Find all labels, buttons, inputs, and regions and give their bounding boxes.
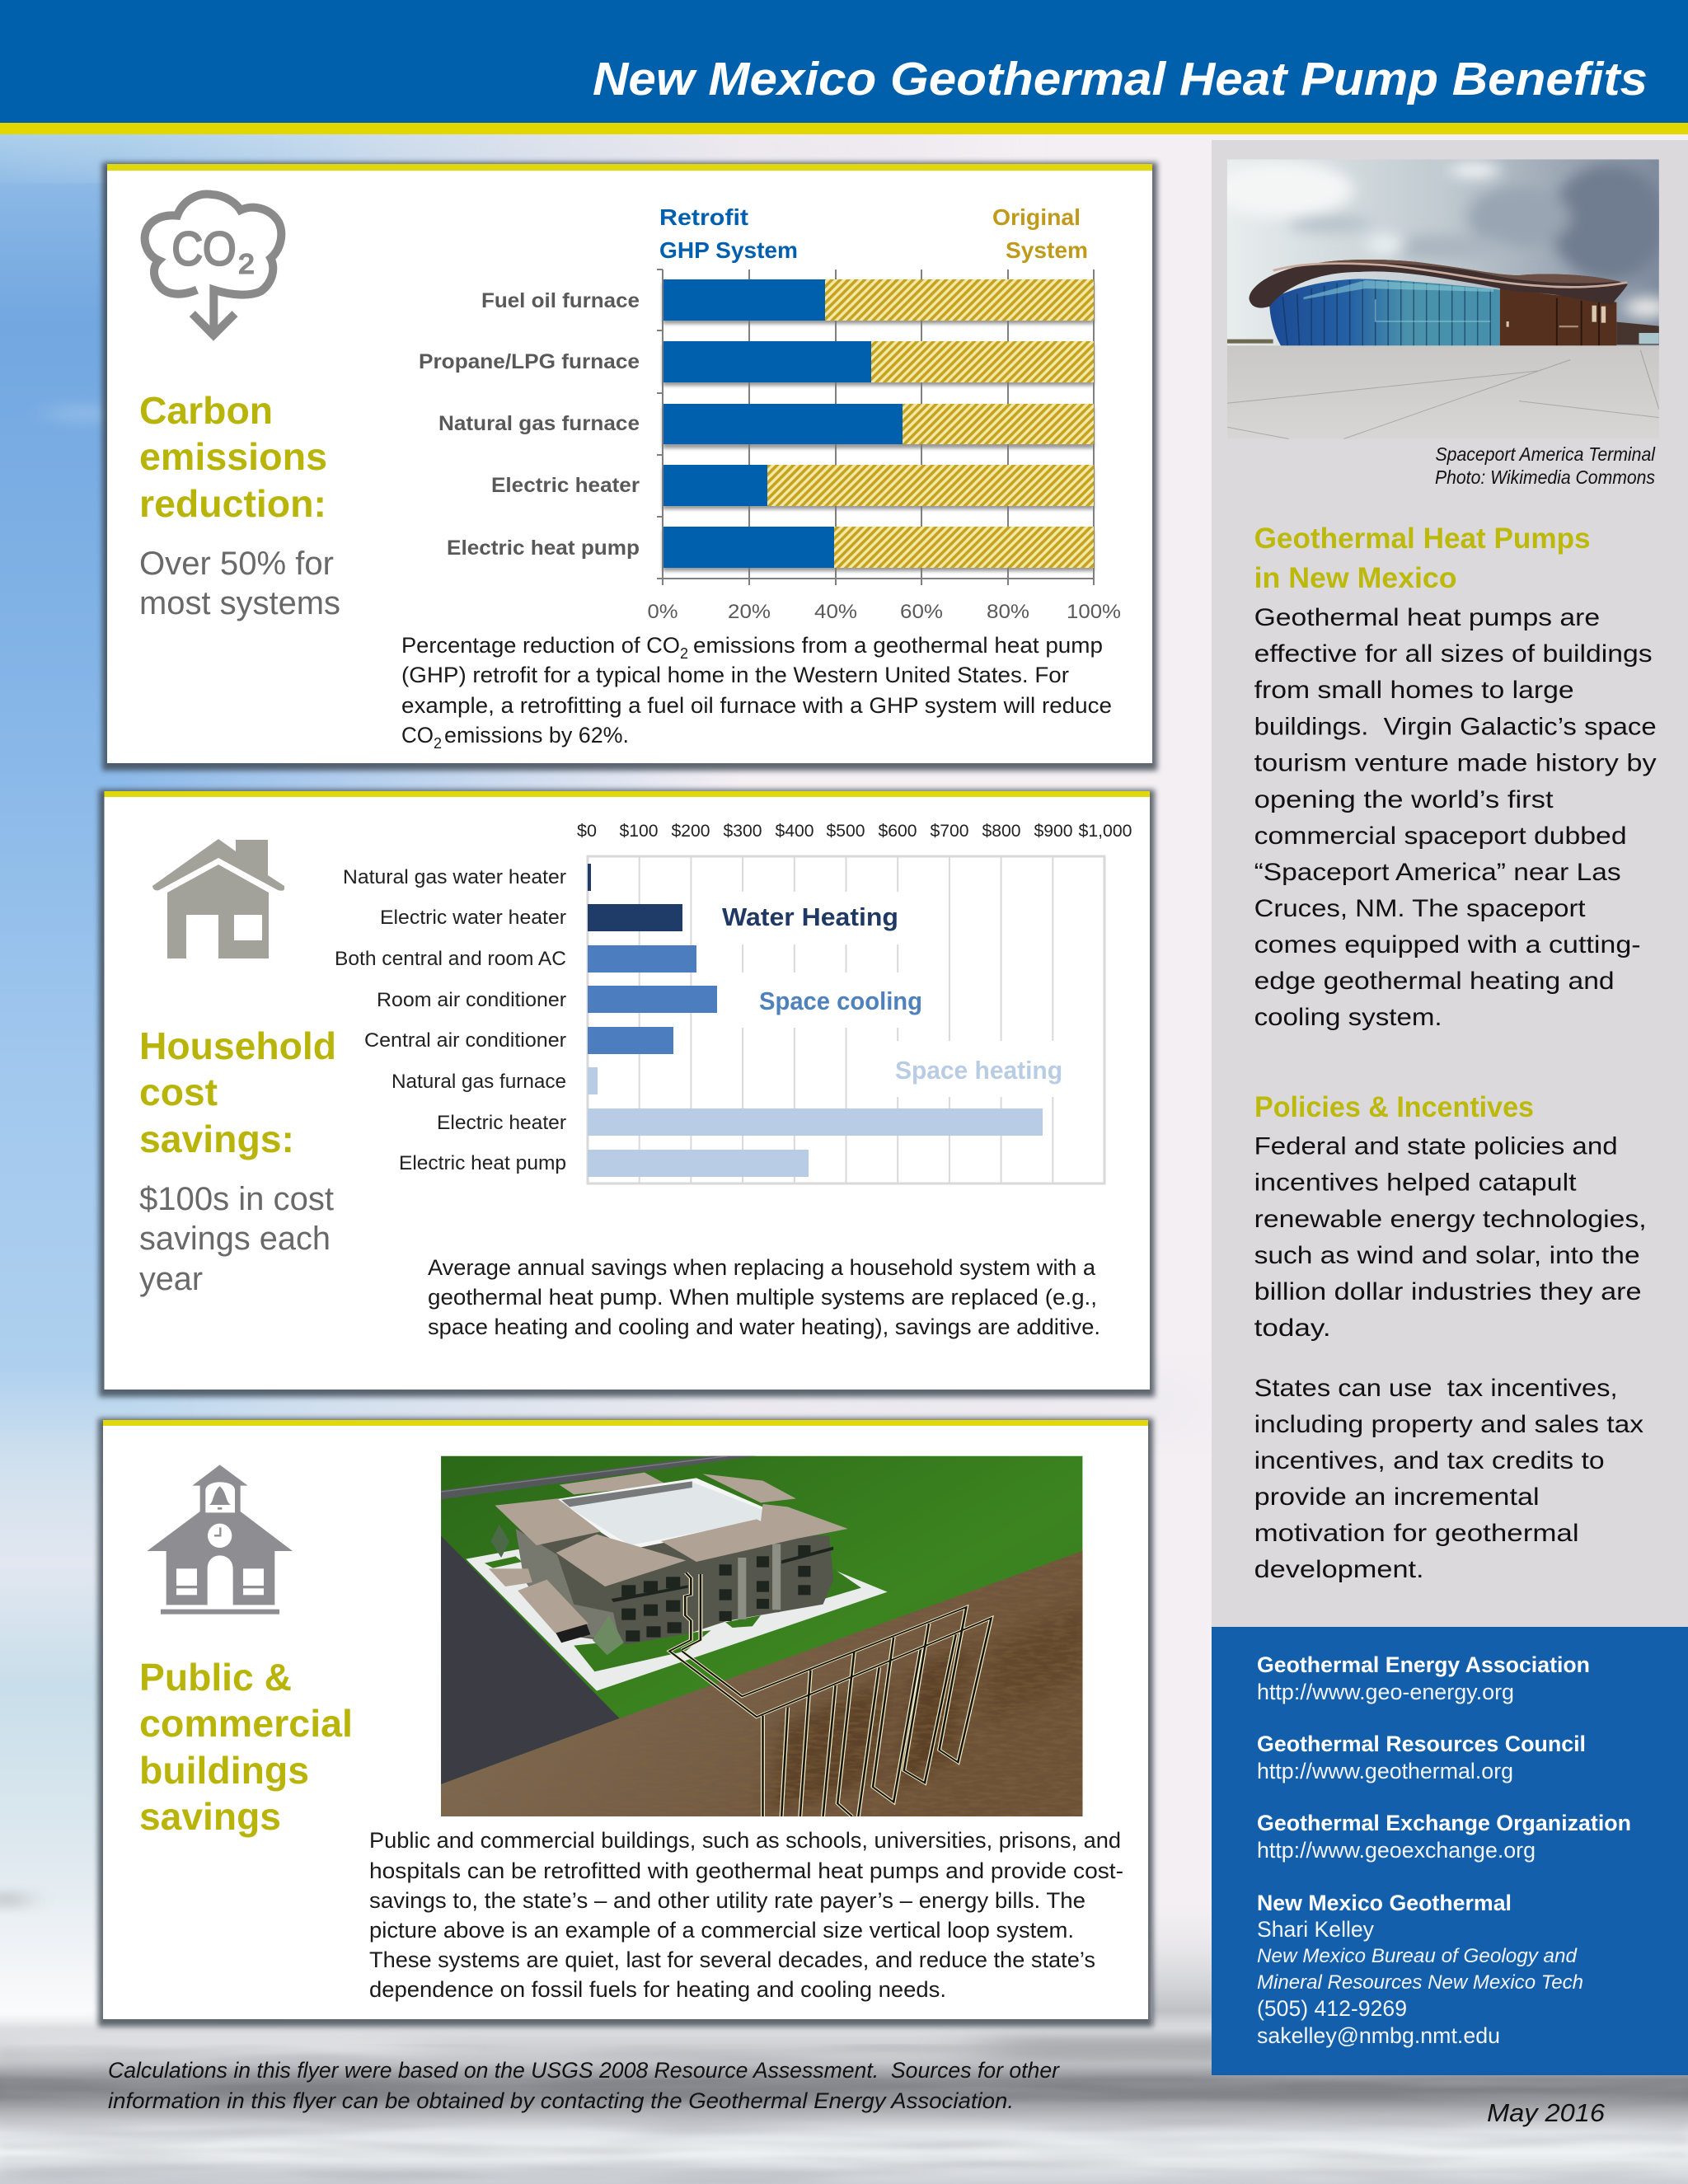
caption: CO2 chart: Percentage reduction of CO (401, 633, 680, 658)
bar chart: annual savings: $600 (879, 822, 917, 841)
icon: CO2 cloud with down arrow (145, 194, 281, 335)
bar chart: CO2 reduction: 60% (900, 601, 943, 623)
caption: household savings (428, 1255, 1100, 1339)
footnote: calculation sources: Calculations in this flyer were based on the USGS 2008 Resource Assessment. Sources for other (108, 2058, 1060, 2083)
caption: CO2 chart: example, a retrofitting a fuel oil furnace with a GHP system will reduce (401, 693, 1112, 718)
contact: New Mexico Geothermal: Mineral Resources New Mexico Tech (1257, 1971, 1583, 1994)
bar chart: annual savings (335, 822, 1132, 1183)
contact: Geothermal Exchange Organization: http://www.geoexchange.org (1257, 1838, 1536, 1863)
text block: spaceport narrative: commercial spaceport dubbed (1254, 823, 1627, 850)
sidewalk (466, 1549, 888, 1691)
panel: contacts (1212, 1627, 1688, 2075)
bar chart: annual savings: Natural gas water heater (343, 866, 566, 888)
contact: New Mexico Geothermal: New Mexico Geothermal (1257, 1891, 1512, 1915)
heading: policies and incentives: Policies & Incentives (1254, 1091, 1534, 1123)
heading: household cost savings: Household (139, 1024, 336, 1067)
bar chart: CO2 reduction: Natural gas furnace (438, 412, 640, 435)
contact: Geothermal Exchange Organization: Geothermal Exchange Organization (1257, 1811, 1631, 1835)
text block: policies: renewable energy technologies, (1254, 1206, 1647, 1233)
text block: policies: motivation for geothermal (1254, 1520, 1579, 1547)
contact: New Mexico Geothermal: (505) 412-9269 (1257, 1996, 1407, 2021)
subheading: 100s in cost savings: $100s in cost (139, 1181, 334, 1217)
bar chart: annual savings: Water Heating (722, 902, 898, 931)
caption: commercial buildings: dependence on fossil fuels for heating and cooling needs. (369, 1977, 946, 2002)
subheading: 100s in cost savings (139, 1181, 334, 1297)
text block: policies: billion dollar industries they are (1254, 1278, 1642, 1305)
heading: household cost savings: savings: (139, 1118, 294, 1160)
contact: Geothermal Energy Association (1257, 1652, 1590, 1704)
bar chart: CO2 reduction: 80% (987, 601, 1029, 623)
bar chart: annual savings: $200 (671, 822, 710, 841)
text block: spaceport narrative: effective for all sizes of buildings (1254, 640, 1653, 668)
contact: New Mexico Geothermal: New Mexico Bureau of Geology and (1257, 1945, 1578, 1967)
text block: spaceport narrative: Cruces, NM. The spaceport (1254, 895, 1586, 922)
text block: policies: today. (1254, 1315, 1331, 1342)
caption: household savings: geothermal heat pump. When multiple systems are replaced (e.g., (428, 1285, 1097, 1310)
caption: spaceport photo credit: Spaceport America Terminal (1436, 443, 1656, 465)
panel: right sidebar (1212, 140, 1688, 1627)
subheading: 100s in cost savings: year (139, 1261, 203, 1297)
caption: commercial buildings: hospitals can be retrofitted with geothermal heat pumps and provide cost- (369, 1858, 1123, 1883)
image: building with vertical ground loop (441, 1456, 1085, 1816)
header band (0, 0, 1688, 134)
bar chart: CO2 reduction: Propane/LPG furnace (419, 350, 640, 373)
text block: spaceport narrative: Geothermal heat pumps are (1254, 604, 1600, 631)
date: May 2016 (1487, 2098, 1606, 2127)
bar chart: CO2 reduction: Original (992, 204, 1081, 230)
caption: household savings: space heating and cooling and water heating), savings are additive. (428, 1315, 1100, 1339)
bar chart: annual savings: Electric water heater (380, 907, 566, 929)
contact: Geothermal Exchange Organization (1257, 1811, 1631, 1863)
heading: public and commercial buildings savings: Public & (139, 1656, 292, 1699)
bar chart: CO2 reduction: Electric heater (491, 474, 640, 497)
bar chart: CO2 reduction: 20% (728, 601, 771, 623)
subheading: over 50 percent: Over 50% for (139, 546, 334, 582)
text block: spaceport narrative: tourism venture made history by (1254, 750, 1657, 777)
caption: CO2 chart: CO (401, 723, 434, 748)
bar chart: annual savings: Both central and room AC (335, 948, 566, 970)
footnote: calculation sources: information in this flyer can be obtained by contacting the Geothermal Energy Association. (108, 2088, 1014, 2113)
icon: CO2 cloud with down arrow: CO (171, 223, 237, 276)
heading: public and commercial buildings savings: buildings (139, 1749, 309, 1792)
text block: spaceport narrative: from small homes to large (1254, 677, 1574, 704)
bar chart: CO2 reduction: Fuel oil furnace (481, 289, 640, 312)
text block: policies: Federal and state policies and (1254, 1133, 1618, 1160)
caption: CO2 chart: 2 (434, 735, 442, 752)
heading: geothermal heat pumps in New Mexico (1254, 523, 1591, 594)
icon: schoolhouse (147, 1465, 293, 1615)
text block: policies: such as wind and solar, into the (1254, 1242, 1640, 1269)
bar chart: annual savings: $800 (982, 822, 1020, 841)
heading: household cost savings (139, 1024, 336, 1160)
heading: carbon emissions reduction: reduction: (139, 482, 326, 525)
heading: geothermal heat pumps in New Mexico: in New Mexico (1254, 562, 1457, 594)
bar chart: CO2 reduction: Retrofit (659, 204, 748, 230)
caption: CO2 chart: 2 (680, 645, 688, 662)
caption: commercial buildings: picture above is an example of a commercial size vertical loop system. (369, 1918, 1074, 1943)
bar chart: annual savings: Space cooling (759, 987, 922, 1015)
contact: Geothermal Resources Council: http://www.geothermal.org (1257, 1759, 1513, 1783)
lawns (485, 1556, 861, 1671)
caption: commercial buildings: savings to, the state’s – and other utility rate payer’s – energy bills. The (369, 1888, 1085, 1913)
caption: CO2 chart: emissions from a geothermal heat pump (693, 633, 1103, 658)
caption: CO2 chart (401, 633, 1112, 752)
text block: policies: incentives, and tax credits to (1254, 1447, 1605, 1474)
contact: Geothermal Resources Council (1257, 1732, 1586, 1783)
text block: spaceport narrative: buildings. Virgin Galactic’s space (1254, 714, 1657, 740)
contact: Geothermal Resources Council: Geothermal Resources Council (1257, 1732, 1586, 1756)
bar chart: annual savings: Electric heat pump (399, 1152, 566, 1174)
icon: CO2 cloud with down arrow: 2 (238, 250, 255, 280)
caption: CO2 chart: emissions by 62%. (444, 723, 629, 748)
bar chart: annual savings: Natural gas furnace (392, 1071, 566, 1093)
heading: carbon emissions reduction (139, 389, 327, 525)
heading: carbon emissions reduction: emissions (139, 435, 327, 478)
caption: spaceport photo credit: Photo: Wikimedia Commons (1435, 466, 1655, 488)
caption: commercial buildings (369, 1828, 1123, 2002)
contact: New Mexico Geothermal: Shari Kelley (1257, 1917, 1374, 1942)
bar chart: CO2 reduction: 40% (814, 601, 857, 623)
heading: geothermal heat pumps in New Mexico: Geothermal Heat Pumps (1254, 523, 1591, 555)
heading: carbon emissions reduction: Carbon (139, 389, 273, 432)
caption: spaceport photo credit (1435, 443, 1656, 488)
bar chart: annual savings: Space heating (895, 1056, 1062, 1085)
caption: commercial buildings: These systems are quiet, last for several decades, and reduce the state’s (369, 1947, 1095, 1972)
contact: Geothermal Energy Association: Geothermal Energy Association (1257, 1652, 1590, 1677)
icon: house (152, 839, 284, 958)
bar chart: CO2 reduction: 100% (1067, 601, 1121, 623)
bar chart: annual savings: $1,000 (1078, 822, 1132, 841)
bar chart: CO2 reduction (419, 204, 1121, 623)
caption: commercial buildings: Public and commercial buildings, such as schools, universities, prisons, and (369, 1828, 1121, 1853)
bar chart: annual savings: Electric heater (437, 1112, 566, 1134)
contact: New Mexico Geothermal: sakelley@nmbg.nmt.edu (1257, 2023, 1500, 2048)
text block: policies: development. (1254, 1556, 1424, 1583)
bar chart: annual savings: $500 (826, 822, 865, 841)
text block: spaceport narrative: opening the world’s first (1254, 786, 1554, 813)
panel: public and commercial buildings savings (98, 1418, 1153, 2027)
caption: CO2 chart: (GHP) retrofit for a typical home in the Western United States. For (401, 663, 1069, 687)
bar chart: annual savings: Room air conditioner (377, 989, 566, 1011)
subheading: over 50 percent (139, 546, 340, 621)
panel: carbon emissions reduction (102, 162, 1157, 771)
text block: spaceport narrative (1254, 604, 1657, 1031)
bar chart: CO2 reduction: GHP System (659, 237, 798, 263)
text block: spaceport narrative: comes equipped with a cutting- (1254, 931, 1641, 958)
subheading: 100s in cost savings: savings each (139, 1221, 331, 1257)
title: New Mexico Geothermal Heat Pump Benefits (593, 53, 1648, 105)
heading: public and commercial buildings savings (139, 1656, 353, 1838)
text block: spaceport narrative: “Spaceport America” near Las (1254, 859, 1621, 886)
image: Spaceport America terminal (1212, 159, 1669, 439)
bar chart: CO2 reduction: System (1006, 237, 1088, 263)
bar chart: annual savings: $700 (930, 822, 969, 841)
text block: policies: provide an incremental (1254, 1483, 1540, 1511)
bar chart: annual savings: $0 (577, 822, 597, 841)
text block: policies: incentives helped catapult (1254, 1169, 1577, 1197)
text block: spaceport narrative: cooling system. (1254, 1004, 1442, 1031)
text block: policies: States can use tax incentives, (1254, 1375, 1618, 1402)
bar chart: CO2 reduction: Electric heat pump (447, 537, 640, 560)
bar chart: annual savings: Central air conditioner (364, 1029, 566, 1052)
panel: household cost savings (99, 790, 1155, 1397)
heading: household cost savings: cost (139, 1071, 218, 1113)
bar chart: annual savings: $100 (620, 822, 658, 841)
contact: Geothermal Energy Association: http://www.geo-energy.org (1257, 1680, 1514, 1704)
subheading: over 50 percent: most systems (139, 585, 340, 621)
contact: New Mexico Geothermal (1257, 1891, 1583, 2048)
text block: spaceport narrative: edge geothermal heating and (1254, 968, 1615, 995)
text block: policies (1254, 1133, 1647, 1583)
heading: public and commercial buildings savings: commercial (139, 1702, 353, 1745)
bar chart: annual savings: $300 (724, 822, 762, 841)
caption: household savings: Average annual savings when replacing a household system with a (428, 1255, 1096, 1280)
heading: public and commercial buildings savings: savings (139, 1795, 281, 1838)
footnote: calculation sources (108, 2058, 1060, 2113)
bar chart: CO2 reduction: 0% (648, 601, 678, 623)
text block: policies: including property and sales tax (1254, 1411, 1643, 1438)
bar chart: annual savings: $900 (1034, 822, 1073, 841)
bar chart: annual savings: $400 (775, 822, 814, 841)
